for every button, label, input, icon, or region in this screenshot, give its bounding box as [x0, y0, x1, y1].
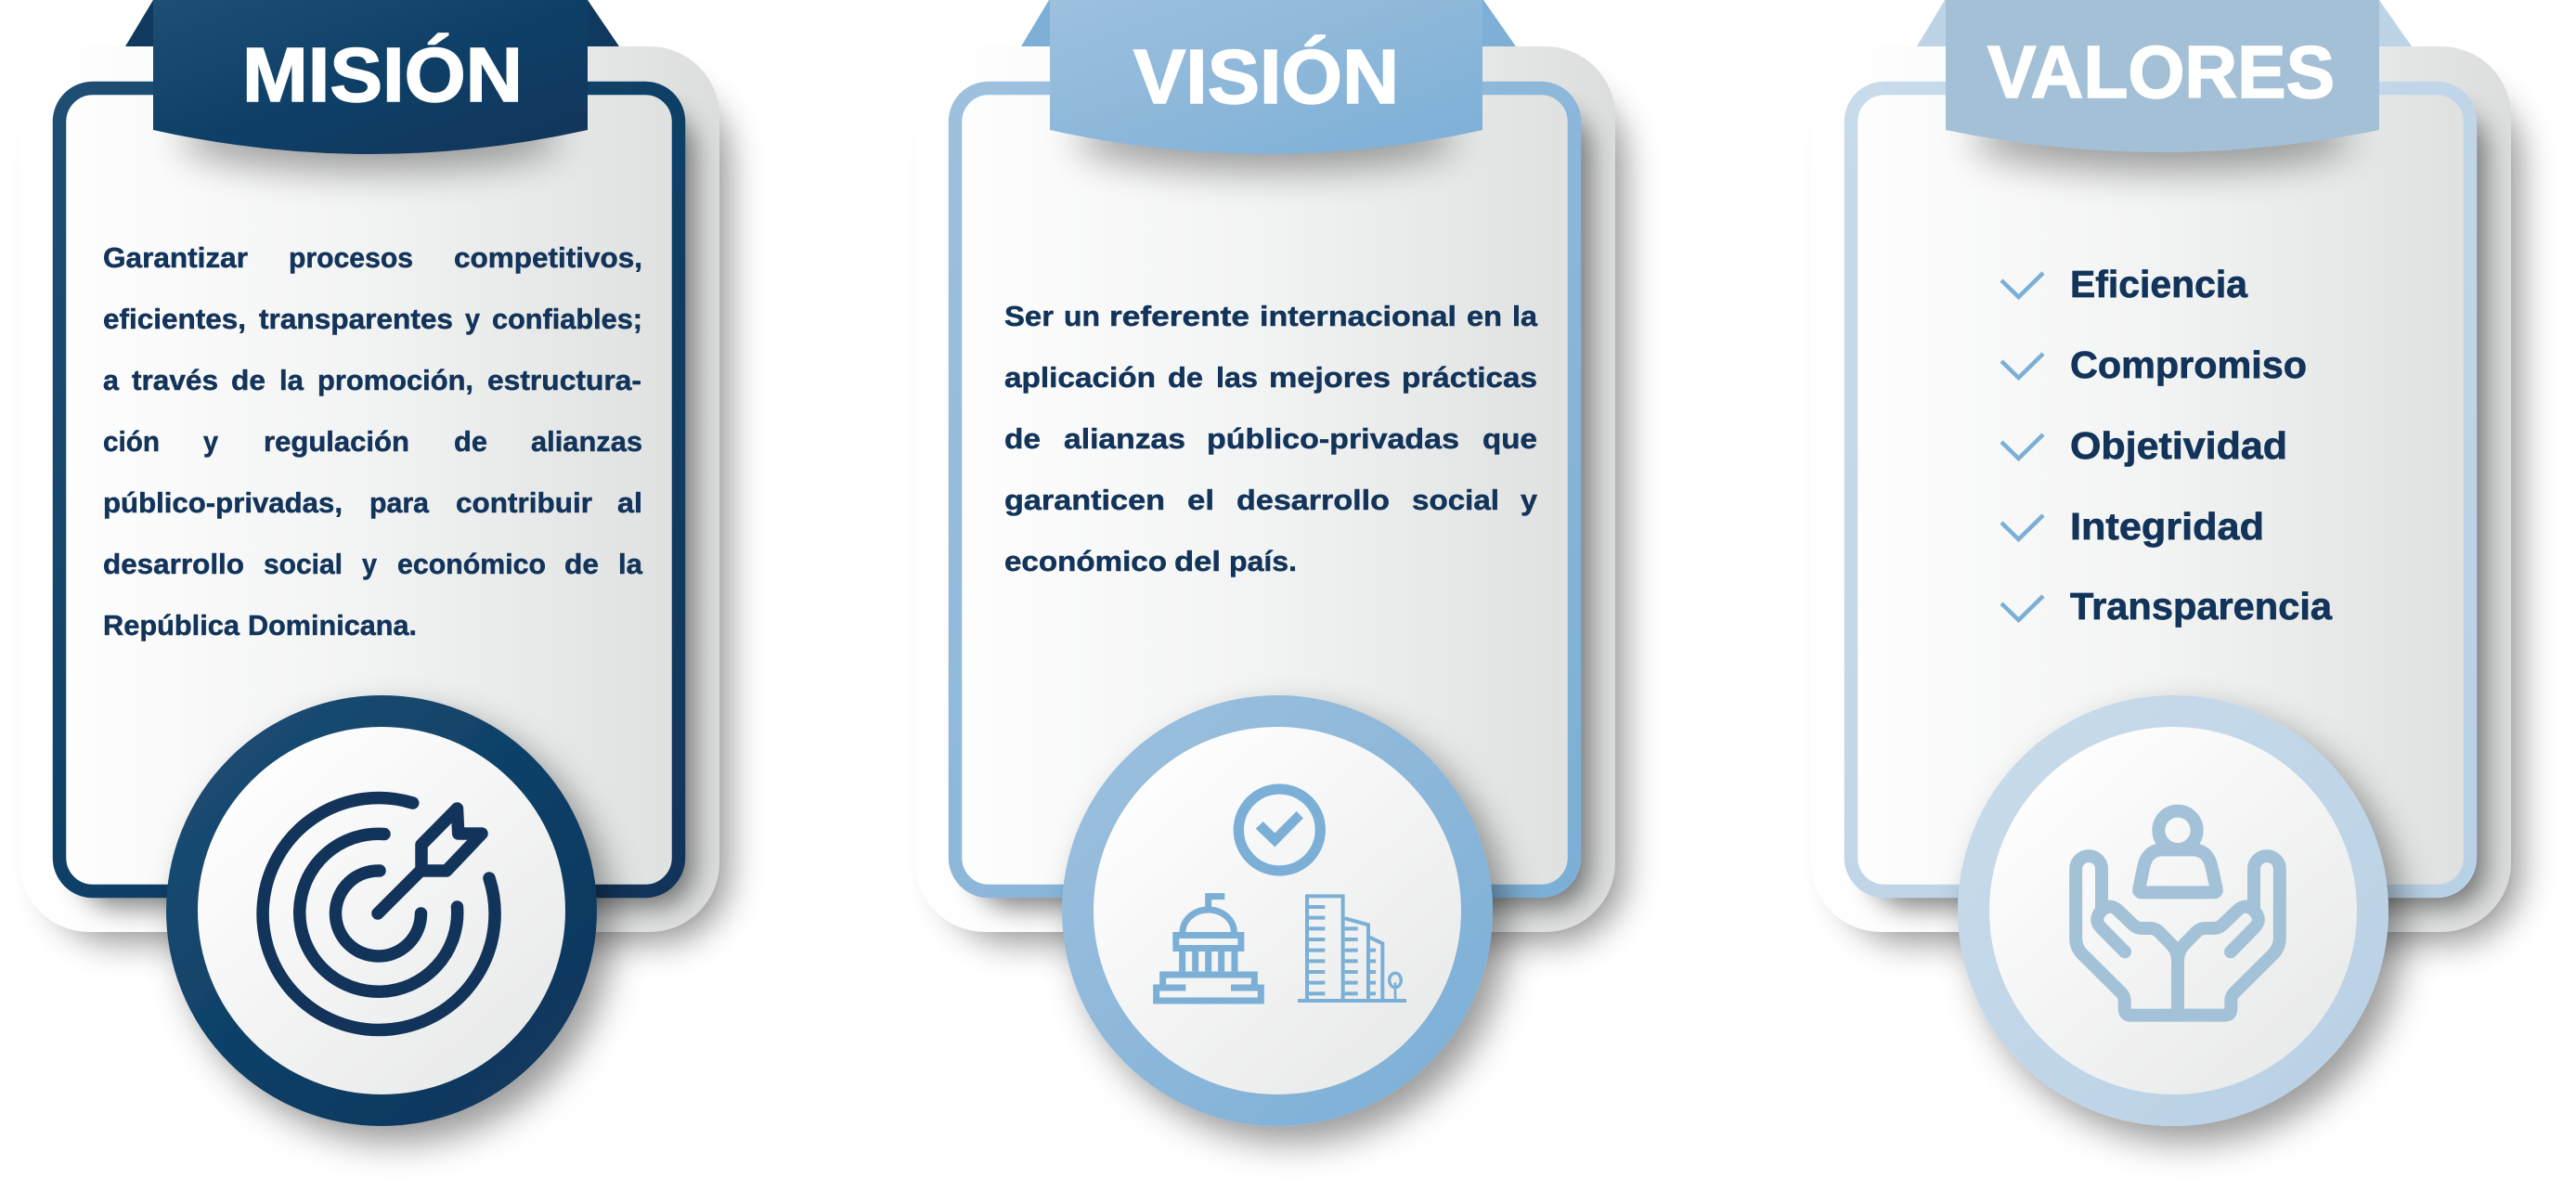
misión text block: Dominicana. — [248, 609, 417, 641]
misión text block: y — [362, 548, 378, 580]
values list: Objetividad — [2070, 424, 2287, 467]
misión text block: de — [231, 364, 265, 396]
misión text block: regulación — [264, 425, 409, 458]
misión text block: estructura- — [487, 364, 641, 396]
visión text block: mejores — [1269, 361, 1391, 394]
misión framed card — [59, 88, 679, 891]
visión text block — [1004, 300, 1538, 577]
visión frame shadow — [976, 111, 1590, 908]
visión text block: referente — [1109, 300, 1249, 332]
visión text block: desarrollo — [1236, 484, 1390, 516]
visión circle — [1078, 711, 1477, 1110]
misión text block: ción — [103, 425, 160, 458]
valores back card — [1811, 46, 2511, 932]
misión banner — [153, 0, 588, 154]
misión text block: al — [617, 486, 642, 519]
misión text block: económico — [397, 548, 546, 580]
misión text block: de — [564, 548, 599, 580]
visión text block: la — [1512, 300, 1538, 332]
visión text block: del — [1174, 545, 1221, 577]
icon: capitol — [1157, 897, 1261, 1001]
valores banner — [1946, 0, 2379, 152]
misión text block: contribuir — [456, 486, 592, 519]
misión back card shadow — [48, 88, 729, 942]
valores circle — [1974, 711, 2373, 1110]
values list — [2001, 263, 2333, 628]
values list: Integridad — [2070, 505, 2264, 548]
check marks — [2001, 273, 2043, 620]
visión text block: que — [1482, 422, 1537, 455]
visión text block: un — [1064, 300, 1100, 332]
visión back card shadow — [944, 88, 1625, 942]
heading: valores: VALORES — [1987, 31, 2335, 113]
visión text block: de — [1168, 361, 1203, 394]
misión text block: Garantizar — [103, 241, 248, 274]
visión text block: público-privadas — [1207, 422, 1459, 455]
misión text block: alianzas — [531, 425, 642, 458]
visión text block: el — [1187, 484, 1214, 516]
visión text block: y — [1521, 484, 1538, 516]
misión ribbon folds — [125, 0, 619, 46]
visión ribbon folds — [1021, 0, 1516, 46]
panel: visión — [915, 0, 1625, 1110]
visión text block: económico — [1004, 545, 1167, 577]
misión text block: República — [103, 609, 240, 641]
misión text block: transparentes — [259, 303, 453, 335]
heading: misión: MISIÓN — [242, 32, 523, 118]
misión text block: la — [618, 548, 643, 580]
visión banner — [1050, 0, 1482, 154]
visión text block: alianzas — [1064, 422, 1185, 455]
visión text block: de — [1004, 422, 1041, 455]
visión text block: las — [1216, 361, 1258, 394]
misión text block: promoción, — [317, 364, 473, 396]
misión banner shadow — [180, 108, 561, 171]
misión text block: público-privadas, — [103, 486, 343, 519]
misión text block: procesos — [289, 241, 413, 274]
values list: Eficiencia — [2070, 263, 2248, 305]
visión text block: internacional — [1260, 300, 1456, 332]
misión text block: competitivos, — [454, 241, 642, 274]
valores frame shadow — [1871, 111, 2486, 908]
misión text block: a — [103, 364, 120, 396]
visión text block: aplicación — [1004, 361, 1156, 394]
misión frame shadow — [80, 111, 694, 908]
valores framed card — [1851, 88, 2470, 891]
icon: check, capitol and buildings — [1157, 789, 1406, 1001]
misión text block: través — [132, 364, 218, 396]
visión back card — [915, 46, 1615, 932]
misión back card — [19, 46, 719, 932]
misión text block: social — [264, 548, 343, 580]
valores back card shadow — [1840, 88, 2520, 942]
visión text block: garanticen — [1004, 484, 1165, 516]
misión text block: y — [465, 303, 481, 335]
misión text block: y — [203, 425, 219, 458]
visión text block: social — [1412, 484, 1499, 516]
visión framed card — [955, 88, 1574, 891]
visión banner shadow — [1076, 108, 1456, 171]
visión text block: Ser — [1004, 300, 1054, 332]
visión text block: en — [1467, 300, 1502, 332]
visión text block: país. — [1229, 545, 1297, 577]
heading: visión: VISIÓN — [1133, 33, 1399, 120]
visión text block: prácticas — [1402, 361, 1537, 394]
misión text block — [103, 241, 643, 641]
misión text block: confiables; — [492, 303, 642, 335]
icon: check circle — [1238, 789, 1320, 871]
misión circle — [182, 711, 581, 1110]
valores banner shadow — [1972, 108, 2352, 171]
values list: Compromiso — [2070, 343, 2307, 386]
icon: buildings — [1298, 896, 1406, 1001]
values list: Transparencia — [2070, 585, 2333, 628]
panel: valores — [1811, 0, 2520, 1110]
icon: target with arrow — [263, 798, 495, 1030]
misión text block: la — [279, 364, 304, 396]
icon: hands holding person — [2076, 811, 2280, 1016]
misión text block: de — [454, 425, 487, 458]
panel: misión — [19, 0, 729, 1110]
misión text block: eficientes, — [103, 303, 246, 335]
misión text block: desarrollo — [103, 548, 244, 580]
valores ribbon folds — [1917, 0, 2412, 46]
misión text block: para — [369, 486, 430, 519]
